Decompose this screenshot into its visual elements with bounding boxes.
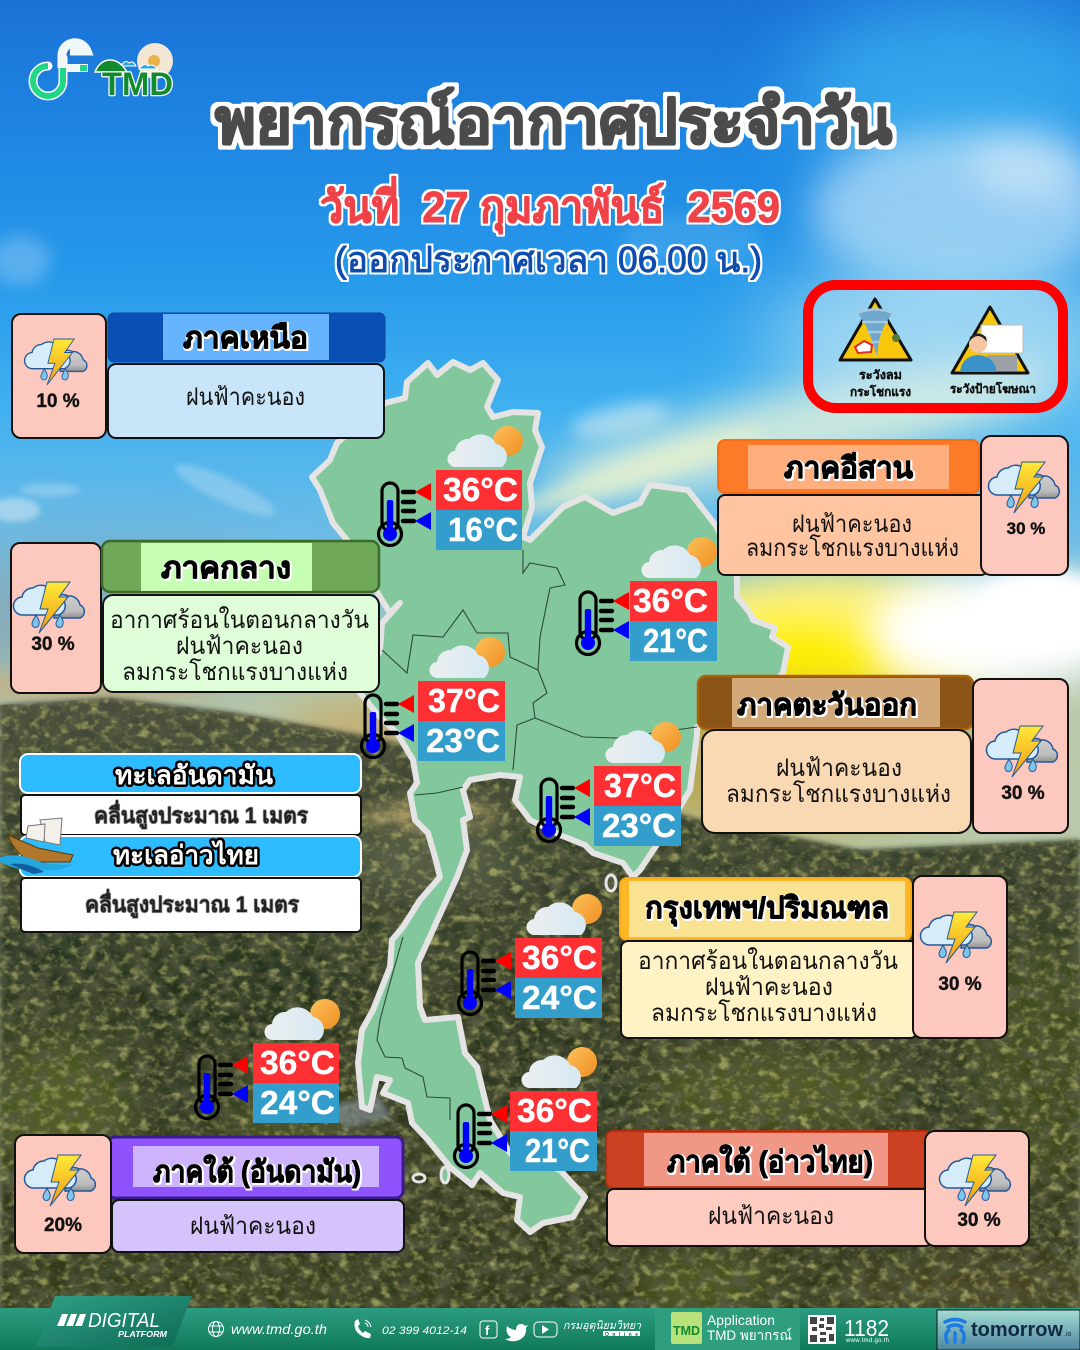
rain chance northeast: 30 % (1007, 519, 1045, 538)
temperature: central: 23°C (426, 722, 500, 759)
panel: east (698, 676, 1068, 833)
temperature: northeast (576, 537, 717, 661)
temperature: east: 37°C (604, 767, 676, 804)
rain chance north (12, 314, 106, 438)
heading Bangkok (620, 878, 911, 940)
social icons: กรมอุตุนิยมวิทยา (563, 1320, 642, 1332)
temperature: lower south: 36°C (517, 1092, 592, 1129)
tomorrow.io logo (937, 1310, 1080, 1350)
temperature: north: 16°C (448, 511, 518, 548)
temperature: upper south (458, 894, 602, 1018)
forecast south Andaman (112, 1200, 404, 1252)
forecast Bangkok (621, 941, 917, 1038)
heading south Gulf (606, 1131, 932, 1188)
panel: south Andaman (15, 1135, 404, 1253)
heading northeast: ภาคอีสาน (784, 452, 913, 485)
forecast south Andaman: ฝนฟ้าคะนอง (190, 1213, 316, 1240)
rain chance south Andaman (15, 1135, 111, 1253)
panel: warnings: ระวังลม (859, 368, 902, 382)
QR code and hotline: 1182 (844, 1315, 889, 1341)
forecast east: ลมกระโชกแรงบางแห่ง (726, 780, 951, 808)
panel: south Gulf (606, 1131, 1029, 1246)
social icons (480, 1320, 642, 1341)
forecast central: ฝนฟ้าคะนอง (176, 633, 303, 660)
forecast Bangkok: อากาศร้อนในตอนกลางวัน (638, 947, 898, 975)
website: www.tmd.go.th (231, 1321, 327, 1337)
phone (354, 1319, 467, 1338)
temperature: upper south: 36°C (522, 939, 597, 976)
temperature: central (362, 637, 505, 761)
logo: TMD: TMD (102, 66, 173, 102)
heading south Gulf: ภาคใต้ (อ่าวไทย) (667, 1144, 873, 1179)
heading north: ภาคเหนือ (183, 322, 308, 355)
social icons: Online (605, 1332, 638, 1338)
Gulf of Thailand waves (21, 878, 361, 932)
temperature: northeast: 21°C (643, 622, 708, 659)
QR code and hotline (808, 1315, 889, 1344)
heading central: ภาคกลาง (161, 552, 291, 585)
title: พยากรณ์อากาศประจำวัน (215, 87, 892, 157)
Digital Platform badge (36, 1296, 192, 1347)
temperature: central: 37°C (428, 682, 500, 719)
temperature: lower south: 21°C (525, 1132, 590, 1169)
forecast south Gulf: ฝนฟ้าคะนอง (708, 1203, 834, 1230)
temperature: upper south: 24°C (522, 979, 597, 1016)
rain chance northeast (981, 436, 1068, 575)
panel: Bangkok and vicinity (620, 876, 1007, 1038)
panel: northeast (718, 436, 1068, 575)
temperature: Andaman: 36°C (260, 1044, 335, 1081)
heading north (108, 313, 385, 362)
forecast northeast: ลมกระโชกแรงบางแห่ง (746, 534, 959, 562)
forecast northeast (718, 495, 988, 575)
rain chance Bangkok: 30 % (938, 974, 982, 995)
panel: north (12, 313, 385, 438)
rain chance south Gulf (925, 1131, 1029, 1246)
forecast north (108, 364, 384, 438)
Gulf of Thailand heading (20, 836, 361, 877)
heading south Andaman: ภาคใต้ (อันดามัน) (153, 1154, 361, 1189)
panel: warnings: กระโชกแรง (850, 384, 911, 399)
temperature: lower south (454, 1047, 597, 1171)
Andaman Sea waves (21, 795, 361, 835)
rain chance east: 30 % (1001, 783, 1045, 804)
forecast south Gulf (607, 1189, 932, 1246)
icon: billboard warning (952, 307, 1028, 373)
app promo: Application (707, 1312, 775, 1328)
heading northeast (718, 440, 979, 493)
phone: 02 399 4012-14 (382, 1325, 467, 1337)
forecast central: ลมกระโชกแรงบางแห่ง (122, 658, 348, 686)
social icons: f (485, 1323, 490, 1338)
temperature: east: 23°C (602, 807, 676, 844)
Andaman Sea heading: ทะเลอันดามัน (115, 760, 273, 790)
map of Thailand (312, 362, 788, 1232)
Andaman Sea heading (20, 754, 361, 793)
forecast east (702, 730, 971, 833)
rain chance south Gulf: 30 % (957, 1210, 1001, 1231)
app promo: TMD (673, 1323, 700, 1338)
tomorrow.io logo: tomorrow (971, 1319, 1063, 1341)
Andaman Sea waves: คลื่นสูงประมาณ 1 เมตร (94, 799, 308, 830)
temperature: east (538, 722, 681, 846)
app promo (655, 1308, 800, 1350)
Digital Platform badge: PLATFORM (118, 1330, 167, 1339)
issue time: (ออกประกาศเวลา 06.00 น.) (335, 239, 762, 280)
rain chance north: 10 % (36, 391, 80, 412)
icon: strong wind warning (840, 299, 911, 360)
forecast Bangkok: ฝนฟ้าคะนอง (705, 974, 833, 1001)
footer bar (0, 1296, 1080, 1350)
forecast northeast: ฝนฟ้าคะนอง (792, 511, 912, 538)
heading east: ภาคตะวันออก (737, 689, 917, 722)
icon: ship (0, 818, 74, 874)
tomorrow.io logo: .io (1064, 1331, 1072, 1338)
app promo: TMD พยากรณ์ (707, 1327, 792, 1343)
temperature: north (378, 426, 523, 550)
heading central (102, 541, 379, 592)
QR code and hotline: www.tmd.go.th (845, 1338, 889, 1344)
rain chance south Andaman: 20% (44, 1215, 82, 1236)
temperature: Andaman (196, 999, 340, 1123)
date: วันที่ 27 กุมภาพันธ์ 2569 (320, 176, 780, 235)
panel: central (11, 541, 379, 693)
temperature: north: 36°C (443, 471, 518, 508)
rain chance central: 30 % (31, 634, 75, 655)
panel: warnings: ระวังป้ายโฆษณา (950, 381, 1036, 396)
forecast central (103, 595, 379, 692)
logo: DE (33, 43, 88, 96)
logos (33, 43, 173, 102)
forecast east: ฝนฟ้าคะนอง (776, 755, 902, 782)
panel: warnings (808, 285, 1063, 408)
rain chance east (973, 679, 1068, 833)
panel: seas (0, 754, 361, 932)
temperature: Andaman: 24°C (260, 1084, 335, 1121)
forecast central: อากาศร้อนในตอนกลางวัน (110, 606, 369, 634)
temperature: northeast: 36°C (633, 582, 708, 619)
heading Bangkok: กรุงเทพฯ/ปริมณฑล (645, 892, 889, 927)
Digital Platform badge: DIGITAL (88, 1310, 160, 1332)
heading south Andaman (108, 1137, 403, 1198)
rain chance central (11, 543, 101, 693)
forecast Bangkok: ลมกระโชกแรงบางแห่ง (651, 999, 877, 1027)
rain chance Bangkok (913, 876, 1007, 1038)
Gulf of Thailand waves: คลื่นสูงประมาณ 1 เมตร (85, 888, 299, 919)
Gulf of Thailand heading: ทะเลอ่าวไทย (113, 839, 259, 870)
heading east (698, 676, 973, 729)
forecast north: ฝนฟ้าคะนอง (186, 384, 305, 411)
